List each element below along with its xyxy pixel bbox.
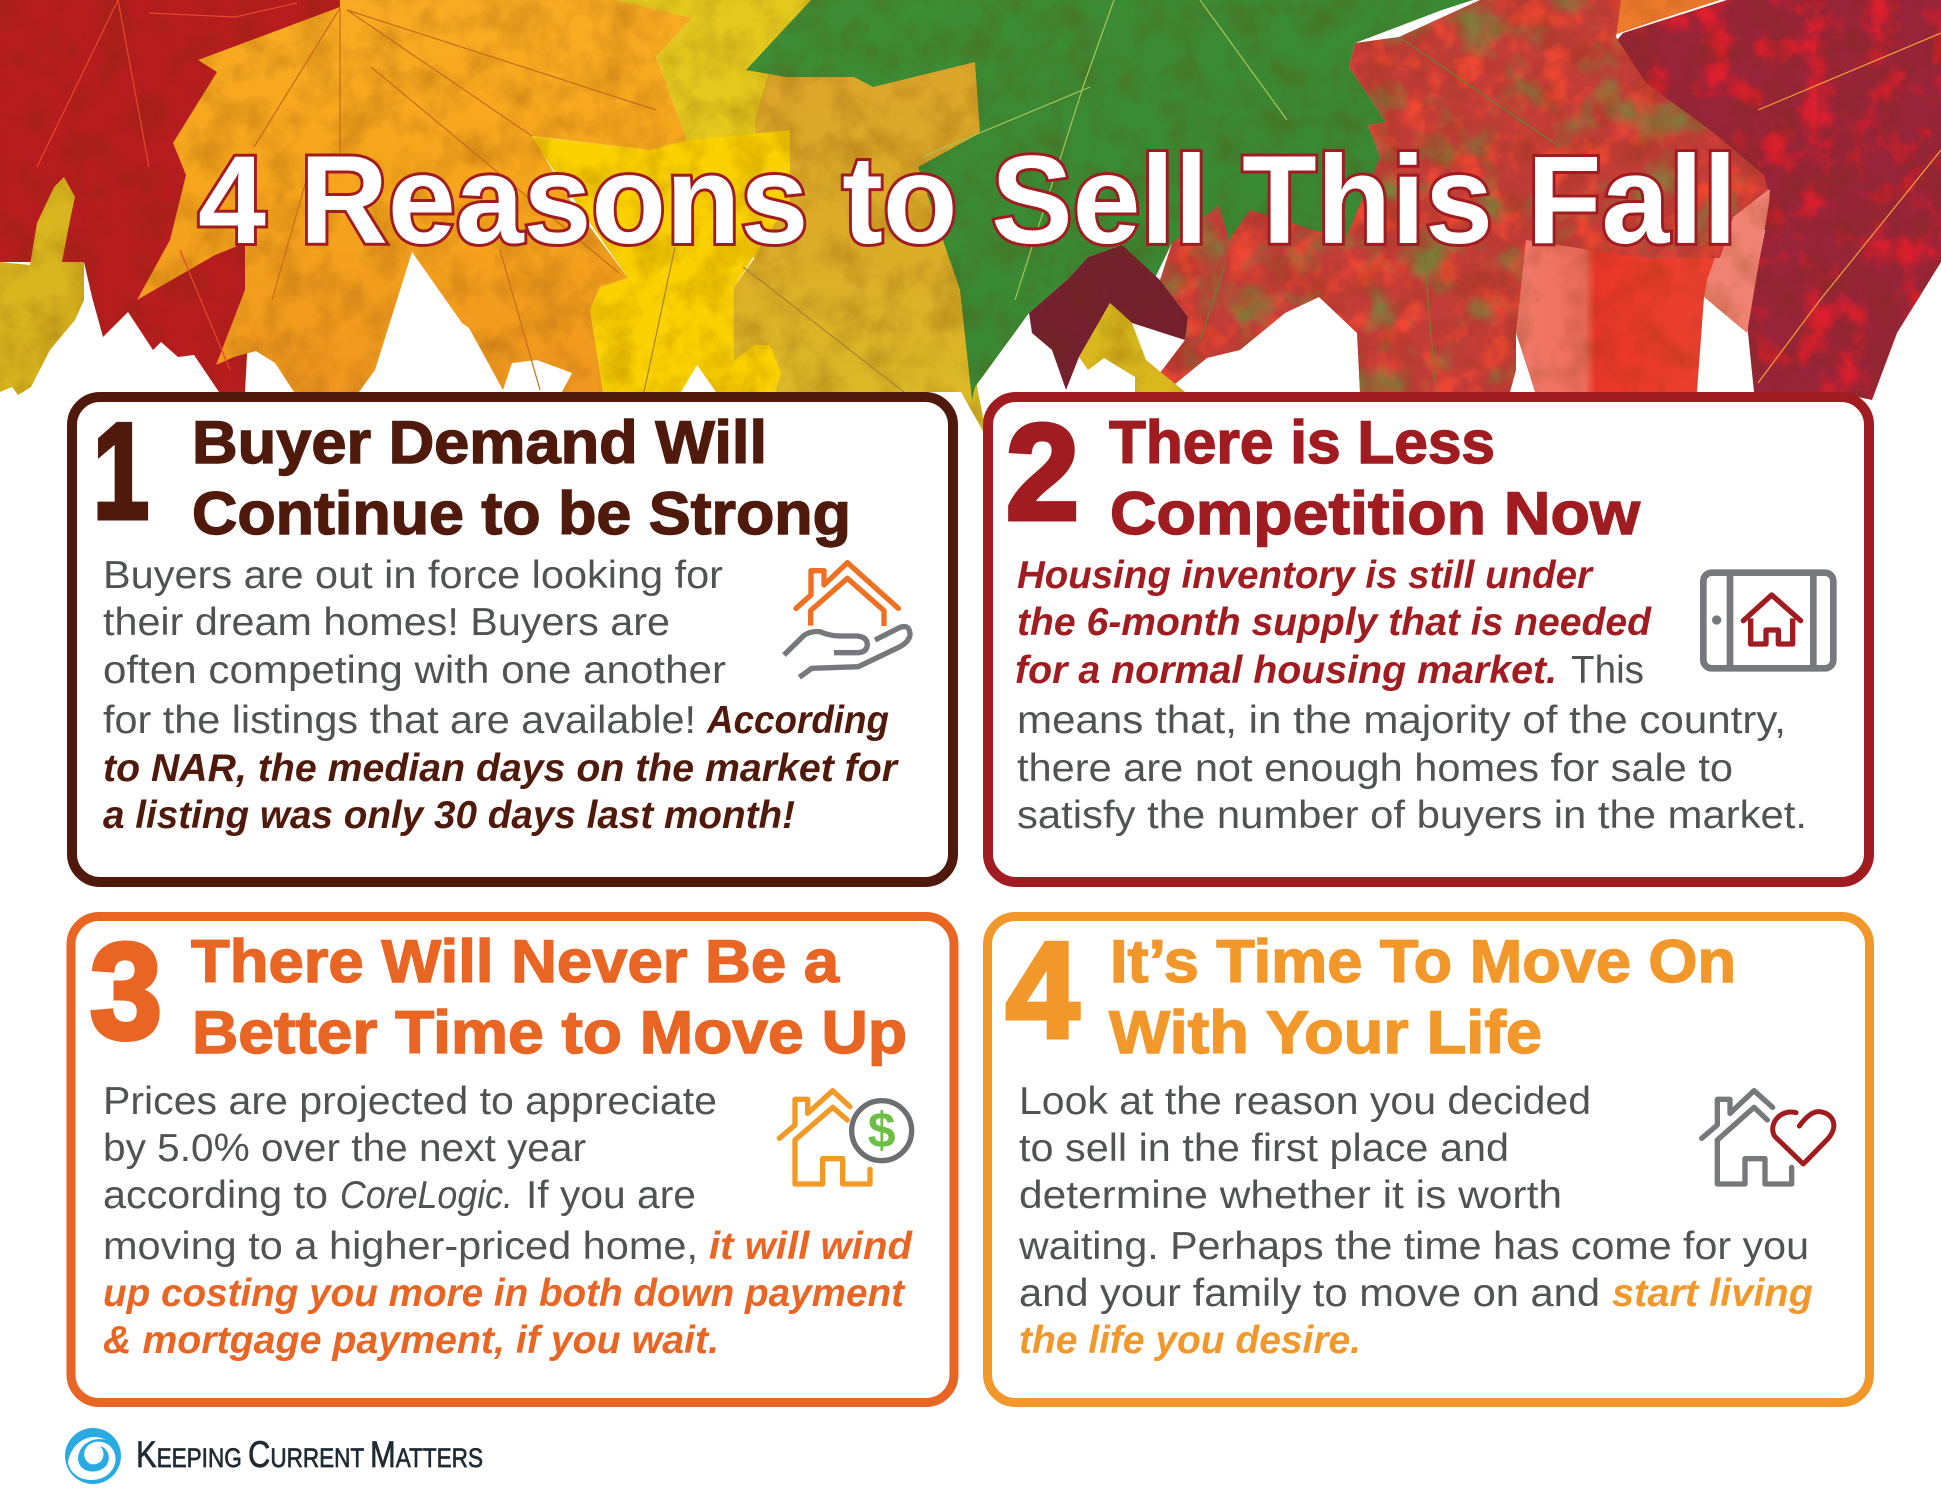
icon: house with heart <box>1702 1091 1834 1184</box>
panel 3 body text: Prices are projected to appreciate <box>103 1080 717 1123</box>
panel 4 heading: It’s Time To Move On <box>1110 928 1736 995</box>
panel 4 body text: the life you desire. <box>1019 1319 1361 1362</box>
panel 2 body text: This <box>1571 649 1644 692</box>
panel 2 body text: satisfy the number of buyers in the market. <box>1017 794 1807 837</box>
leaf: small yellow left <box>0 177 84 395</box>
panel 3 body text: & mortgage payment, if you wait. <box>103 1319 719 1362</box>
panel 2 body text: there are not enough homes for sale to <box>1017 747 1733 790</box>
panel 2 body text <box>1015 554 1807 837</box>
panel 1 body text: often competing with one another <box>103 649 726 692</box>
panel 2 heading: Competition Now <box>1110 480 1640 547</box>
leaf: mottled red and green <box>1147 0 1768 392</box>
panel 3 body text: by 5.0% over the next year <box>103 1127 586 1170</box>
panel 3 number: 3 <box>90 915 162 1067</box>
panel 3 frame <box>71 916 954 1402</box>
background leaves <box>0 0 1941 440</box>
panel 4 number: 4 <box>1006 914 1079 1066</box>
leaf: bright yellow lower <box>530 130 790 392</box>
panel 2 body text: for a normal housing market. <box>1015 649 1557 692</box>
panel 2 heading <box>1109 409 1640 547</box>
panel 4 body text <box>1018 1080 1813 1362</box>
panel 2 body text: Housing inventory is still under <box>1017 554 1594 597</box>
panel 4 body text: waiting. Perhaps the time has come for you <box>1018 1225 1809 1268</box>
panel 1 number: 1 <box>93 395 149 547</box>
panel 3: time to move up <box>71 915 954 1402</box>
logo wordmark: KEEPING CURRENT MATTERS <box>136 1434 483 1475</box>
panel 2 heading: There is Less <box>1109 409 1495 476</box>
leaf: dark crimson far right <box>1600 0 1941 400</box>
panel 4 body text: to sell in the first place and <box>1019 1127 1509 1170</box>
leaf: dark red left <box>0 0 345 392</box>
panel 4 body text: Look at the reason you decided <box>1019 1080 1591 1123</box>
panel 2 body text: the 6-month supply that is needed <box>1017 601 1652 644</box>
panel 4 body text: and your family to move on and <box>1019 1272 1600 1315</box>
panel 4 heading <box>1109 928 1736 1066</box>
leaf: large orange <box>137 0 692 392</box>
leaf: salmon and red lower <box>1516 230 1725 392</box>
panel 3 body text: If you are <box>526 1174 696 1217</box>
panel 2 number: 2 <box>1006 396 1079 548</box>
icon: house with dollar coin: $ <box>868 1102 896 1158</box>
panel 3 body text: up costing you more in both down payment <box>103 1272 906 1315</box>
panel 2 frame <box>988 397 1869 882</box>
panel 3 body text <box>103 1080 914 1362</box>
leaf: yellow top centre <box>613 0 820 260</box>
panel 4 heading: With Your Life <box>1109 999 1542 1066</box>
icon: house with dollar coin <box>779 1091 912 1184</box>
leaf: gold centre <box>734 50 1000 440</box>
panel 1 heading: Continue to be Strong <box>192 480 851 547</box>
panel 4 body text: start living <box>1612 1272 1813 1315</box>
panel 3 heading: There Will Never Be a <box>191 928 840 995</box>
panel 4 frame <box>988 916 1870 1402</box>
leaf: pink right of centre <box>1700 180 1770 333</box>
leaf: orange top sliver <box>1609 0 1720 35</box>
panel 1 body text: to NAR, the median days on the market for <box>103 747 899 790</box>
panel 1 body text: for the listings that are available! <box>103 699 696 742</box>
leaf veins <box>37 0 1941 392</box>
leaf: dark maroon <box>1029 245 1188 390</box>
panel 3 heading: Better Time to Move Up <box>192 999 907 1066</box>
logo swirl icon <box>65 1428 121 1484</box>
logo: Keeping Current Matters <box>65 1428 483 1484</box>
panel 1: buyer demand <box>72 395 953 882</box>
leaf: yellow sliver <box>1079 303 1185 392</box>
panel 2: less competition <box>988 396 1869 882</box>
icon: house in hand <box>784 563 910 677</box>
panel 3 body text: it will wind <box>709 1225 914 1268</box>
panel 1 body text: their dream homes! Buyers are <box>103 601 670 644</box>
icon: tablet with house <box>1703 573 1833 668</box>
leaf: green <box>746 0 1473 400</box>
panel 1 body text: a listing was only 30 days last month! <box>103 794 795 837</box>
panel 1 body text: Buyers are out in force looking for <box>103 554 723 597</box>
panel 3 body text: CoreLogic. <box>340 1174 513 1217</box>
panel 1 frame <box>72 397 953 882</box>
panel 1 body text <box>103 554 899 837</box>
title: 4 Reasons to Sell This Fall <box>198 131 1737 270</box>
panel 3 heading <box>191 928 907 1066</box>
panel 2 body text: means that, in the majority of the country, <box>1017 699 1786 742</box>
panel 1 body text: According <box>706 699 889 742</box>
panel 1 heading: Buyer Demand Will <box>192 409 767 476</box>
panel 3 body text: according to <box>103 1174 328 1217</box>
panel 3 body text: moving to a higher-priced home, <box>103 1225 698 1268</box>
panel 1 heading <box>192 409 851 547</box>
panel 4 body text: determine whether it is worth <box>1019 1174 1562 1217</box>
panel 4: move on with your life <box>988 914 1870 1402</box>
